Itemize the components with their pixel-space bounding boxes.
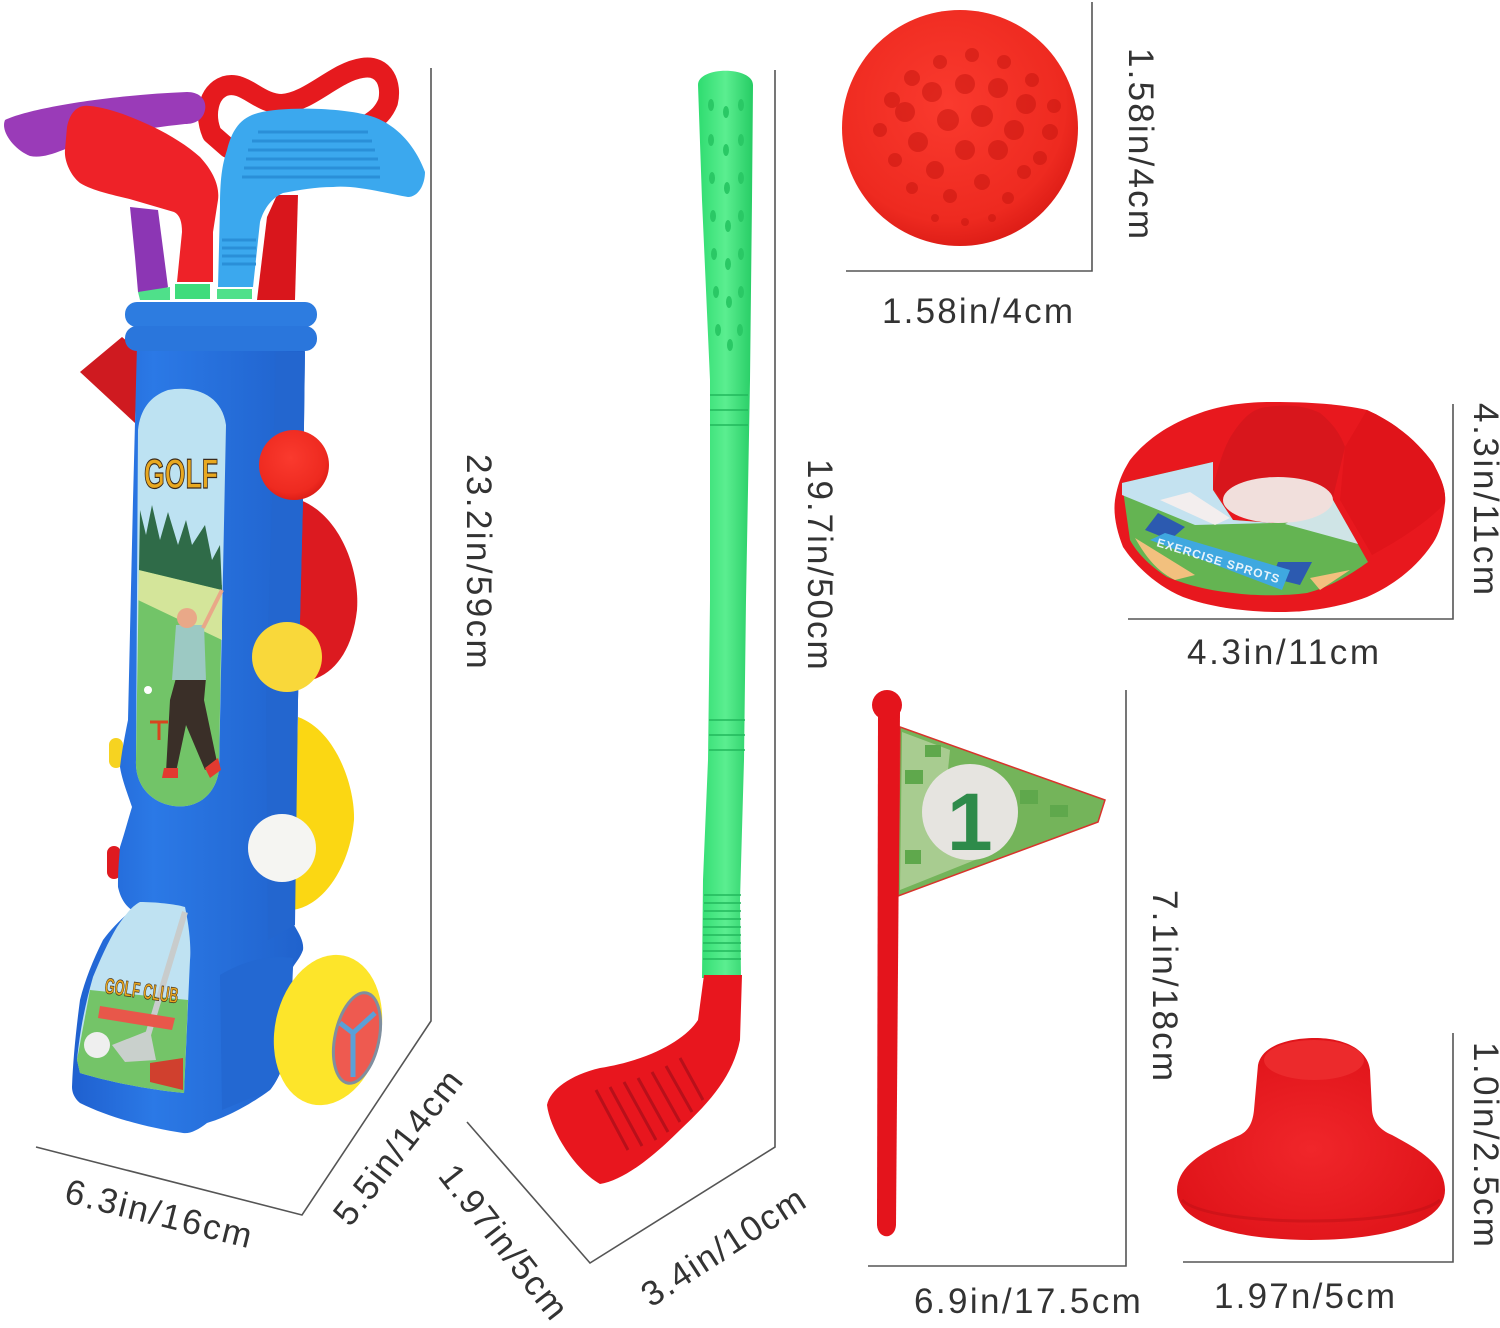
dimension lines: flag (868, 690, 1126, 1266)
red ball on bag (259, 430, 329, 500)
bag rim (125, 302, 317, 351)
dimension lines: ball (846, 2, 1092, 271)
dimension label: ball height: 1.58in/4cm (1121, 48, 1160, 241)
trees (139, 505, 222, 590)
flag pennant (898, 727, 1105, 896)
golf cup (1114, 402, 1445, 612)
dimension label: flag width: 6.9in/17.5cm (914, 1282, 1143, 1321)
base bump (220, 957, 293, 1110)
ribbon text: EXERCISE SPROTS (1155, 535, 1282, 586)
red back shaft (257, 195, 298, 300)
pole (877, 712, 900, 1236)
golf bag set (4, 68, 425, 1133)
club head (547, 975, 742, 1184)
red handle (208, 68, 389, 148)
dimension lines: tee (1183, 1033, 1453, 1262)
purple club head (4, 92, 205, 157)
flag numeral: 1 (947, 777, 993, 868)
dimension lines: cup (1128, 404, 1453, 619)
red club head (65, 106, 218, 282)
golfer (166, 678, 217, 772)
picture panel lower (77, 902, 190, 1093)
red flap behind bag (80, 337, 138, 423)
yellow disc behind bag (293, 717, 354, 910)
dimension label: bag width: 6.3in/16cm (61, 1172, 258, 1257)
dimension label: tee width: 1.97n/5cm (1214, 1277, 1397, 1316)
dimension label: ball width: 1.58in/4cm (882, 292, 1075, 331)
flag ball (922, 764, 1018, 860)
blue club (218, 109, 425, 287)
banner ends (1145, 513, 1312, 585)
lower logo: GOLF CLUB (103, 973, 180, 1008)
GOLF logo: GOLF (144, 450, 218, 497)
dimension label: bag height: 23.2in/59cm (459, 454, 498, 671)
bag side ridge (266, 352, 305, 940)
cup hole (1213, 406, 1345, 521)
yellow ball on bag (252, 622, 322, 692)
white ball on bag (248, 814, 316, 882)
red golf ball (842, 10, 1078, 246)
golf club (547, 71, 753, 1184)
golf flag (872, 690, 1105, 1236)
purple shaft (130, 207, 168, 293)
dimension label: club length: 19.7in/50cm (800, 459, 839, 672)
printed sticker (1122, 462, 1368, 595)
dimension lines: club (467, 70, 775, 1263)
red nub (107, 846, 121, 879)
dimension label: cup width: 4.3in/11cm (1187, 633, 1382, 672)
bag body (72, 345, 305, 1133)
red disc behind bag (300, 500, 357, 682)
dimension label: bag depth: 5.5in/14cm (326, 1061, 472, 1233)
cup right facet (1340, 410, 1445, 555)
wheel (260, 945, 396, 1115)
dimension lines: golf bag (36, 68, 431, 1215)
dimension label: head width: 1.97in/5cm (431, 1157, 577, 1328)
dimension label: flag height: 7.1in/18cm (1145, 890, 1184, 1083)
dimension label: head length: 3.4in/10cm (634, 1179, 814, 1315)
picture panel on bag (136, 389, 226, 806)
yellow nub (109, 738, 123, 768)
rubber tee (1177, 1038, 1445, 1240)
